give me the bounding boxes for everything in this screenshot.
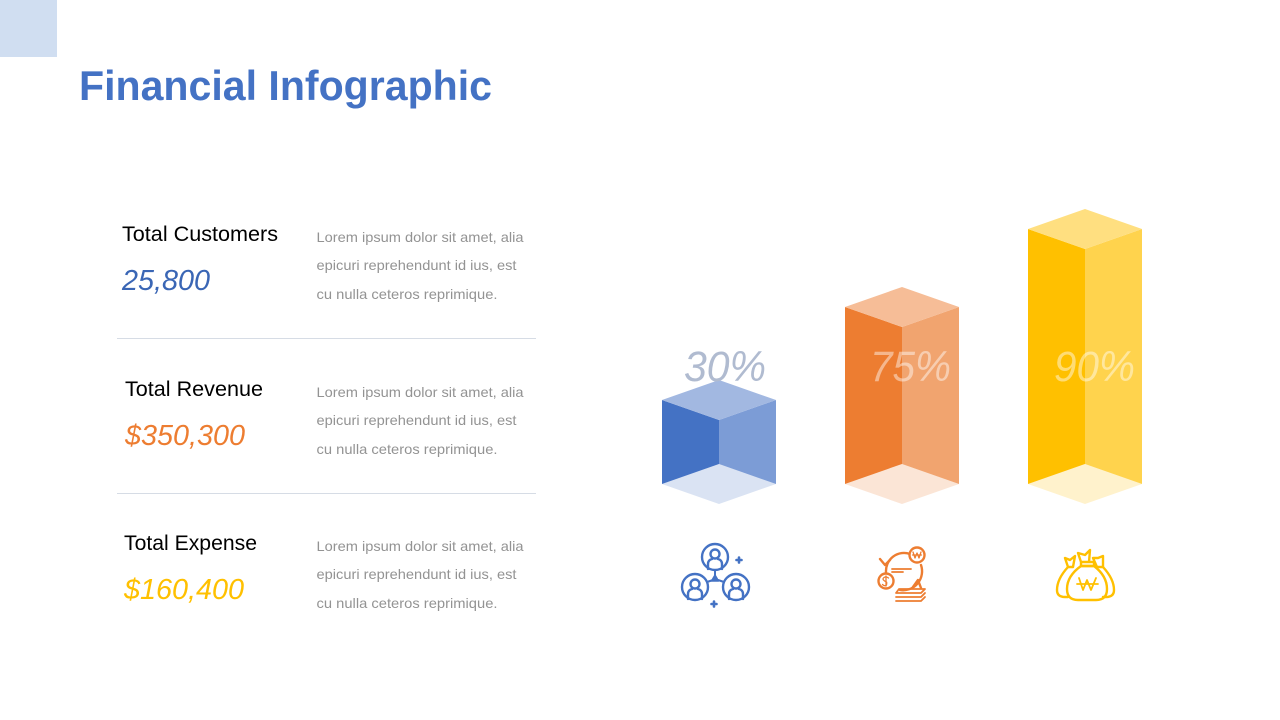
text block: expense description: Lorem ipsum dolor sit amet, alia <box>316 538 524 554</box>
icon: money exchange <box>878 548 925 601</box>
heading: total revenue: Total Revenue <box>125 378 263 401</box>
text block: customers description <box>316 229 524 302</box>
panel: total customers <box>121 223 524 302</box>
icon: money bags <box>1057 550 1114 600</box>
label: 30%: 30% <box>684 343 766 391</box>
value: customers: 25,800 <box>121 265 210 297</box>
bar: orange 75% <box>845 287 959 504</box>
text block: expense description: epicuri reprehendunt id ius, est <box>316 566 517 582</box>
text block: customers description: epicuri reprehendunt id ius, est <box>316 257 517 273</box>
text block: revenue description <box>316 384 524 457</box>
value: expense: $160,400 <box>123 574 244 606</box>
bar: blue 30% <box>662 380 776 504</box>
label: 90%: 90% <box>1054 343 1135 391</box>
title: Financial Infographic <box>79 62 492 109</box>
heading: total customers: Total Customers <box>122 223 278 246</box>
value: revenue: $350,300 <box>124 420 245 452</box>
label: 75%: 75% <box>870 343 951 391</box>
icon: connected people <box>682 544 749 606</box>
corner accent square <box>0 0 57 57</box>
bar: yellow 90% <box>1028 209 1142 504</box>
text block: customers description: cu nulla ceteros reprimique. <box>316 286 498 302</box>
text block: revenue description: epicuri reprehendunt id ius, est <box>316 412 517 428</box>
text block: expense description <box>316 538 524 611</box>
heading: total expense: Total Expense <box>124 532 257 555</box>
text block: revenue description: Lorem ipsum dolor sit amet, alia <box>316 384 524 400</box>
panel: total expense <box>123 532 524 611</box>
panel: total revenue <box>124 378 524 457</box>
text block: customers description: Lorem ipsum dolor sit amet, alia <box>316 229 524 245</box>
text block: expense description: cu nulla ceteros reprimique. <box>316 595 498 611</box>
text block: revenue description: cu nulla ceteros reprimique. <box>316 441 498 457</box>
